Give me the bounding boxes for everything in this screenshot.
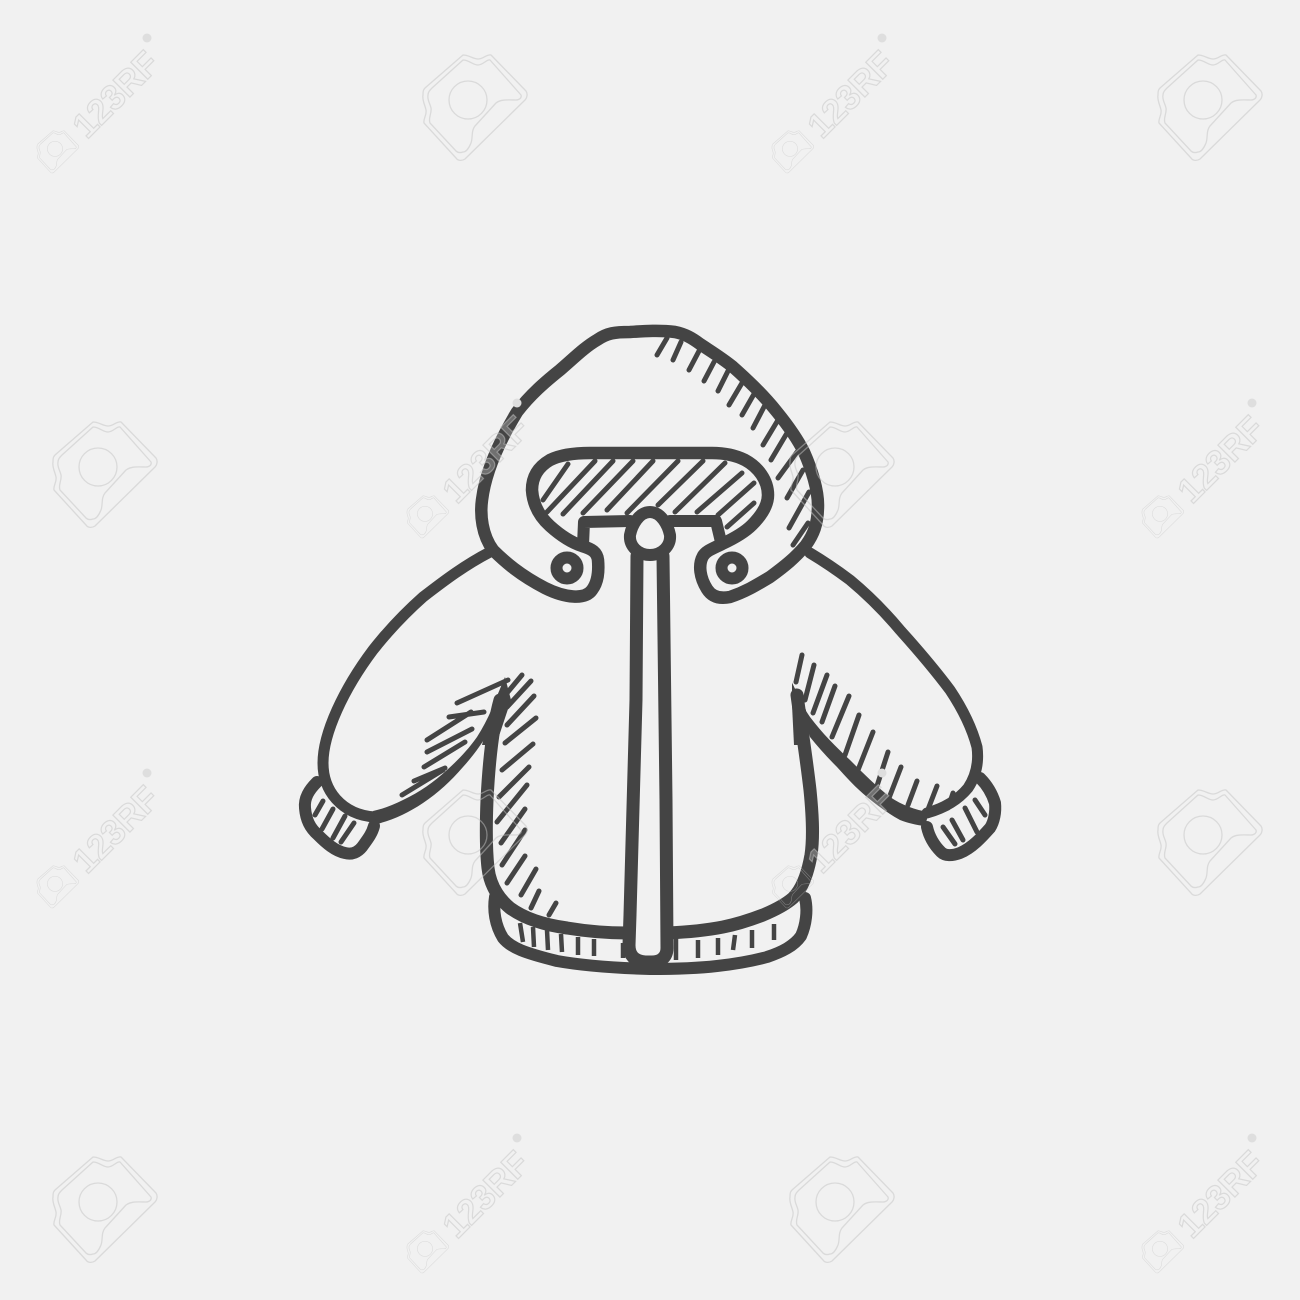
left hood button xyxy=(556,558,578,578)
face opening hatches xyxy=(543,461,754,527)
left sleeve xyxy=(323,552,504,824)
watermark: 123RF stamp row 1 centre-right xyxy=(772,34,902,173)
watermark: logo row 3 right xyxy=(1158,790,1262,895)
right sleeve hatches xyxy=(796,655,953,812)
watermark: 123RF stamp row 4: 123RF xyxy=(435,1144,537,1246)
watermark: logo row 3 xyxy=(423,790,527,895)
right sleeve xyxy=(792,553,978,826)
watermark: 123RF stamp row 2 right: 123RF xyxy=(1170,409,1272,511)
left sleeve hatches xyxy=(402,680,508,795)
hood collar xyxy=(583,521,721,545)
watermark: logo row 2 centre xyxy=(790,422,894,527)
watermark: 123RF stamp row 2: 123RF xyxy=(435,409,537,511)
watermark: 123RF stamp row 1 centre-right: 123RF xyxy=(800,44,902,146)
watermark: 123RF stamp row 1 left xyxy=(37,34,167,173)
body left hatches xyxy=(497,675,556,915)
watermark: logo row 1 right xyxy=(1158,55,1262,160)
left cuff xyxy=(305,782,374,854)
watermark: 123RF stamp row 3 centre-right xyxy=(772,768,902,908)
watermark: logo row 2 left xyxy=(53,422,157,527)
watermark: logo row 4 centre xyxy=(790,1157,894,1262)
watermark: 123RF stamp row 4 xyxy=(407,1134,537,1273)
zipper pull xyxy=(630,512,670,555)
lower hem xyxy=(494,897,806,969)
watermark: 123RF stamp row 4 right: 123RF xyxy=(1170,1144,1272,1246)
watermark: logo row 1 xyxy=(423,55,527,160)
zipper xyxy=(629,556,667,962)
watermark: 123RF stamp row 2 right xyxy=(1142,398,1272,538)
watermark: 123RF stamp row 3 left: 123RF xyxy=(65,779,167,881)
watermark: logo row 4 left xyxy=(53,1157,157,1262)
right hood button xyxy=(722,558,742,578)
watermark: 123RF stamp row 3 centre-right: 123RF xyxy=(800,779,902,881)
watermark: 123RF stamp row 4 right xyxy=(1142,1134,1272,1273)
watermark: 123RF stamp row 3 left xyxy=(37,768,167,908)
watermark: 123RF stamp row 1 left: 123RF xyxy=(65,44,167,146)
watermark: 123RF stamp row 2 xyxy=(407,398,537,538)
icon: hooded jacket sketch xyxy=(305,331,995,969)
hood shading hatches xyxy=(657,338,809,545)
hem ribbing xyxy=(520,923,774,960)
right cuff xyxy=(927,778,995,855)
hood with face opening xyxy=(481,331,818,598)
body outline and upper hem xyxy=(482,677,813,933)
